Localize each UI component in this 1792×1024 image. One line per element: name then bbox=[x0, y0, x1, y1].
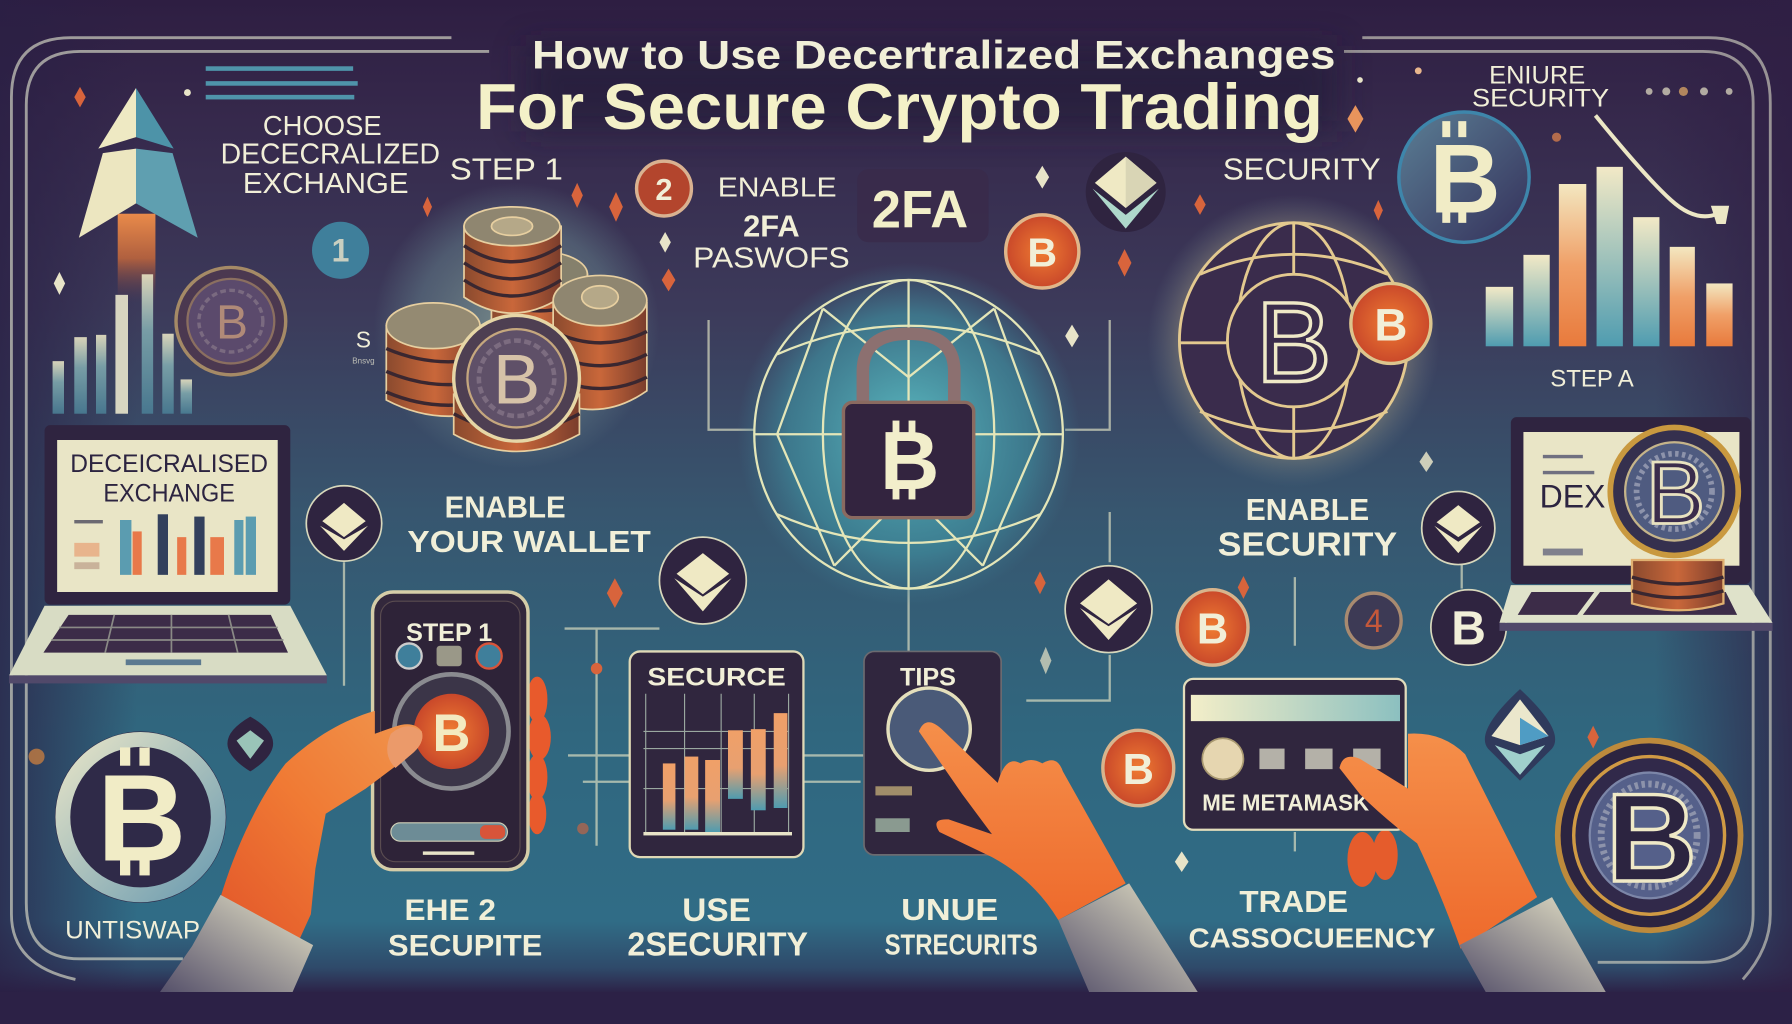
icon: bitcoin big top right: B bbox=[1430, 124, 1501, 234]
badge: number 1: 1 bbox=[332, 233, 349, 269]
icon: bitcoin logo bottom left bbox=[55, 731, 226, 903]
panel: metamask card bbox=[1184, 679, 1406, 887]
badge: number 2: 2 bbox=[655, 172, 673, 207]
badge: 2fa box: 2FA bbox=[872, 180, 968, 239]
title: How to Use Decertralized Exchanges bbox=[532, 34, 1335, 78]
icon: ethereum diamond bbox=[1485, 689, 1555, 781]
panel: phone: STEP 1 bbox=[406, 619, 492, 647]
icon: right sleeve middle bbox=[1058, 883, 1198, 992]
text: enable security: ENABLE bbox=[1246, 492, 1369, 527]
text: faint S label: S bbox=[356, 326, 371, 352]
icon: bitcoin coin left bbox=[176, 267, 286, 375]
text: bottom step 2 security bbox=[388, 894, 542, 962]
panel: phone: B bbox=[432, 704, 470, 763]
badge: number 4 bbox=[1346, 593, 1401, 648]
icon: central globe and padlock: B bbox=[880, 416, 939, 507]
icon: dark b badge bbox=[1431, 590, 1506, 665]
text: enable 2fa passwords: ENABLE bbox=[718, 172, 837, 203]
icon: orange coin top: B bbox=[1027, 229, 1057, 275]
text: enable your wallet: ENABLE bbox=[445, 490, 566, 525]
decorative sparkles bbox=[29, 67, 1733, 872]
icon: left hand holding phone bbox=[221, 711, 422, 939]
text: use 2security: 2SECURITY bbox=[627, 926, 808, 963]
text: trade cryptocurrency: CASSOCUEENCY bbox=[1189, 922, 1435, 953]
icon: bitcoin logo bottom left: B bbox=[97, 750, 186, 888]
text: bottom step 2 security: SECUPITE bbox=[388, 929, 542, 962]
text: unue strecurits: STRECURITS bbox=[885, 929, 1038, 961]
icon: dark b badge: B bbox=[1451, 603, 1486, 656]
badge: number 4: 4 bbox=[1365, 603, 1383, 639]
icon: small diamond eye bbox=[227, 717, 273, 771]
panel: metamask card: ME METAMASK bbox=[1202, 789, 1370, 815]
arrow: falling trend bbox=[1595, 115, 1729, 224]
icon: laptop right with coin: B bbox=[1646, 442, 1705, 542]
badge: 2fa box bbox=[857, 169, 989, 242]
icon: orange coin bottom: B bbox=[1123, 746, 1154, 794]
icon: right hand holding card bbox=[1339, 734, 1537, 949]
text: enable 2fa passwords: PASWOFS bbox=[693, 242, 850, 274]
panel: tips card bbox=[864, 651, 1001, 855]
icon: left sleeve bbox=[160, 895, 313, 992]
text: choose exchange: CHOOSE bbox=[263, 110, 382, 141]
icon: orange coin mid right: B bbox=[1197, 605, 1228, 653]
icon: bitcoin coin left: B bbox=[216, 296, 248, 349]
text: security: SECURITY bbox=[1223, 151, 1381, 186]
text: faint S label: Bnsvg bbox=[352, 356, 375, 365]
icon: diamond badge centre right bbox=[1065, 566, 1152, 653]
text: bottom step 2 security: EHE 2 bbox=[405, 894, 496, 927]
icon: laptop left: DECEICRALISED bbox=[70, 450, 268, 478]
icon: laptop right with coin bbox=[1499, 417, 1773, 631]
icon: coin stacks: B bbox=[493, 340, 540, 419]
icon: bitcoin coin bottom right: B bbox=[1606, 767, 1697, 908]
text: enable your wallet: YOUR WALLET bbox=[407, 524, 651, 559]
text: faint S label bbox=[352, 326, 375, 365]
badge: number 2 bbox=[637, 161, 691, 216]
text: use 2security bbox=[627, 892, 808, 963]
bar chart: left bbox=[53, 274, 192, 414]
icon: orange coin top bbox=[1006, 215, 1079, 288]
icon: laptop left: EXCHANGE bbox=[103, 480, 235, 508]
text: enable 2fa passwords bbox=[693, 172, 850, 274]
icon: globe with bitcoin bbox=[1147, 194, 1440, 487]
icon: globe with bitcoin: B bbox=[1374, 300, 1407, 351]
text: unue strecurits bbox=[885, 892, 1038, 961]
text: enable security bbox=[1218, 492, 1397, 563]
text: choose exchange: DECECRALIZED bbox=[221, 138, 440, 170]
icon: central globe and padlock bbox=[737, 263, 1080, 606]
icon: bitcoin big top right bbox=[1399, 112, 1529, 242]
connector lines bbox=[344, 320, 1462, 851]
icon: diamond badge centre left bbox=[659, 537, 746, 624]
bar chart: right bbox=[1486, 167, 1733, 346]
text: unue strecurits: UNUE bbox=[901, 892, 998, 927]
icon: coin stacks bbox=[374, 183, 659, 469]
icon: diamond badge left bbox=[306, 486, 382, 561]
icon: diamond badge right bbox=[1422, 491, 1495, 565]
text: trade cryptocurrency bbox=[1189, 884, 1435, 953]
icon: right sleeve bbox=[1459, 897, 1606, 992]
icon: laptop left bbox=[9, 425, 327, 683]
text: step 1: STEP 1 bbox=[450, 151, 563, 186]
icon: pointing hand bbox=[919, 722, 1126, 920]
icon: orange coin bottom bbox=[1103, 730, 1174, 806]
decorative dashes bbox=[206, 66, 358, 99]
text: enable your wallet bbox=[407, 490, 651, 559]
title bbox=[476, 34, 1337, 143]
text: ensure security: SECURITY bbox=[1472, 84, 1609, 112]
text: enable 2fa passwords: 2FA bbox=[743, 209, 800, 244]
text: choose exchange bbox=[221, 110, 440, 200]
text: step 4: STEP A bbox=[1550, 365, 1634, 392]
icon: laptop right with coin: DEX bbox=[1540, 478, 1605, 514]
panel: secure chart: SECURCE bbox=[647, 664, 786, 692]
text: ensure security bbox=[1472, 61, 1609, 112]
text: enable security: SECURITY bbox=[1218, 526, 1397, 563]
text: uniswap: UNTISWAP bbox=[65, 916, 200, 944]
icon: rocket arrow bbox=[79, 88, 198, 303]
text: trade cryptocurrency: TRADE bbox=[1239, 884, 1348, 919]
text: ensure security: ENIURE bbox=[1489, 61, 1585, 89]
icon: globe with bitcoin: B bbox=[1256, 280, 1332, 407]
icon: diamond badge top bbox=[1086, 152, 1166, 232]
text: choose exchange: EXCHANGE bbox=[243, 168, 409, 200]
panel: tips card: TIPS bbox=[900, 664, 956, 692]
title: For Secure Crypto Trading bbox=[476, 70, 1323, 143]
text: use 2security: USE bbox=[682, 892, 751, 928]
icon: bitcoin coin bottom right bbox=[1558, 741, 1741, 930]
icon: orange coin mid right bbox=[1177, 590, 1248, 665]
panel: phone bbox=[373, 592, 551, 870]
panel: secure chart bbox=[630, 651, 803, 857]
badge: number 1 bbox=[312, 222, 369, 279]
